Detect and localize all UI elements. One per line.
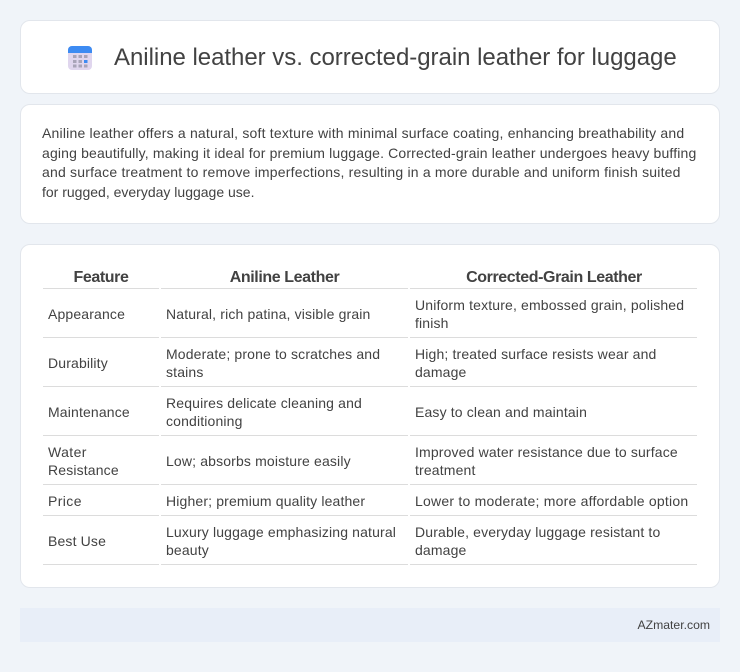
- row: durability: High; treated surface resists wear and: [415, 346, 656, 362]
- row: water resistance: [48, 444, 678, 478]
- row: best use: [48, 524, 660, 558]
- intro text: Aniline leather offers a natural, soft texture with minimal surface coating, enhancing breathability and: [42, 125, 684, 141]
- row: maintenance: conditioning: [166, 413, 243, 429]
- row: water resistance: treatment: [415, 462, 476, 478]
- intro text: [42, 125, 696, 200]
- icon: calendar: [68, 46, 92, 70]
- row: price: Lower to moderate; more affordable option: [415, 493, 688, 509]
- row: price: [48, 493, 688, 509]
- row: water resistance: Water: [48, 444, 87, 460]
- row: appearance: Appearance: [48, 306, 125, 322]
- row: appearance: [48, 297, 684, 331]
- footer text: AZmater.com: [638, 618, 710, 632]
- row: maintenance: Requires delicate cleaning and: [166, 395, 362, 411]
- row: price: Price: [48, 493, 82, 509]
- row: appearance: Uniform texture, embossed grain, polished: [415, 297, 684, 313]
- row: water resistance: Low; absorbs moisture easily: [166, 453, 351, 469]
- footer bar: [20, 608, 720, 642]
- row: appearance: Natural, rich patina, visible grain: [166, 306, 370, 322]
- row: best use: damage: [415, 542, 466, 558]
- row: best use: Best Use: [48, 533, 106, 549]
- row: maintenance: Maintenance: [48, 404, 130, 420]
- row: water resistance: Resistance: [48, 462, 119, 478]
- row: best use: beauty: [166, 542, 209, 558]
- title: Aniline leather vs. corrected-grain leather for luggage: [114, 44, 677, 71]
- header panel: [20, 20, 720, 94]
- row: maintenance: Easy to clean and maintain: [415, 404, 587, 420]
- row: best use: Durable, everyday luggage resistant to: [415, 524, 660, 540]
- row: durability: [48, 346, 656, 380]
- row: appearance: finish: [415, 315, 449, 331]
- row: durability: stains: [166, 364, 203, 380]
- intro panel: [20, 104, 720, 224]
- intro text: and surface treatment to remove imperfections, resulting in a more durable and uniform finish suited: [42, 164, 681, 180]
- row: price: Higher; premium quality leather: [166, 493, 365, 509]
- table header: Corrected-Grain Leather: [466, 269, 642, 286]
- row: best use: Luxury luggage emphasizing natural: [166, 524, 396, 540]
- intro text: for rugged, everyday luggage use.: [42, 184, 254, 200]
- row: durability: Moderate; prone to scratches and: [166, 346, 380, 362]
- row: durability: Durability: [48, 355, 108, 371]
- row: maintenance: [48, 395, 587, 429]
- table header: [74, 269, 642, 286]
- intro text: aging beautifully, making it ideal for premium luggage. Corrected-grain leather undergoes heavy buffing: [42, 145, 696, 161]
- table header: Feature: [74, 269, 128, 286]
- comparison table panel: [20, 244, 720, 588]
- row: durability: damage: [415, 364, 466, 380]
- table header: Aniline Leather: [230, 269, 339, 286]
- row: water resistance: Improved water resistance due to surface: [415, 444, 678, 460]
